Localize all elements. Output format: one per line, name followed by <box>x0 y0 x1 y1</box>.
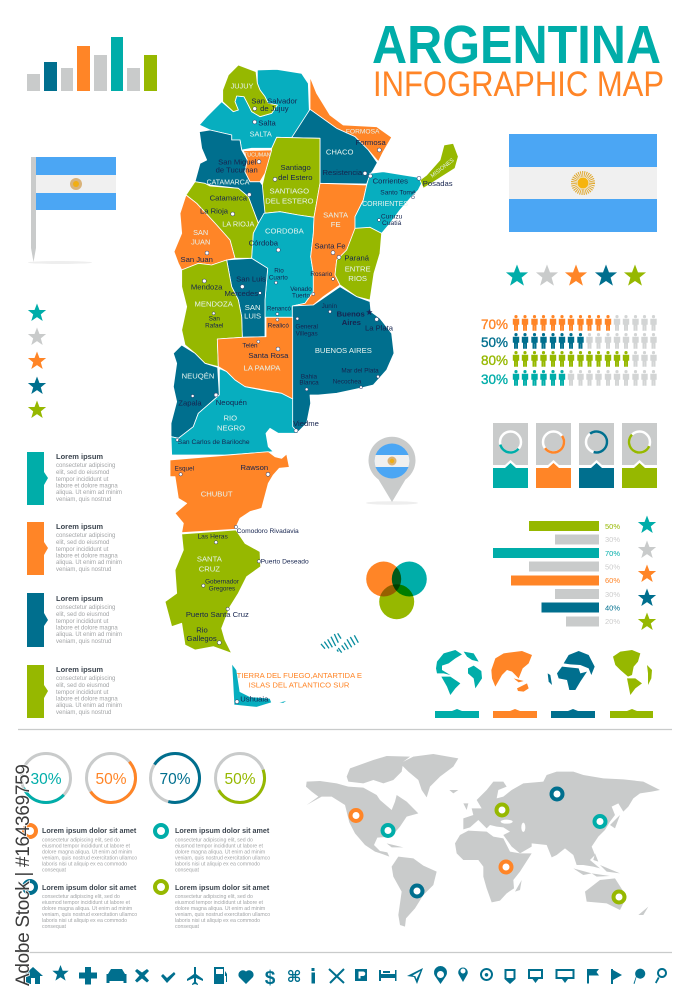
people pictogram chart: 50% <box>481 335 508 350</box>
icon: dollar: $ <box>265 968 276 989</box>
city labels: Corrientes <box>373 176 408 185</box>
card dark blue <box>579 423 614 488</box>
small flag on pole <box>28 157 116 264</box>
text block teal: Lorem ipsum <box>56 452 103 461</box>
globe dark blue <box>548 651 595 690</box>
icon: info <box>312 968 315 984</box>
divider lines <box>18 730 672 952</box>
city labels: Rosario <box>310 271 333 278</box>
text block teal: aliqua. Ut enim ad minim <box>56 490 122 496</box>
horizontal bar chart: 20% <box>605 617 620 626</box>
city labels: del Estero <box>278 173 313 182</box>
text block orange: elit, sed do eiusmod <box>56 540 109 546</box>
province labels: TUCUMAN <box>244 153 271 159</box>
bullet block teal: consectetur adipiscing elit, sed do <box>175 838 253 844</box>
title <box>372 15 664 104</box>
city labels: Las Heras <box>197 533 229 540</box>
title: ARGENTINA <box>372 15 661 75</box>
city labels: Mar del Plata <box>341 367 379 374</box>
icon: car <box>106 969 126 983</box>
bullet block orange: veniam, quis nostrud exercitation ullamco <box>42 856 137 862</box>
city labels: de Tucuman <box>216 165 258 174</box>
bullet block teal: veniam, quis nostrud exercitation ullamco <box>175 856 270 862</box>
province: Jujuy <box>223 65 277 117</box>
city labels: Santa Fe <box>314 241 346 250</box>
icon: plane <box>187 967 203 985</box>
icon: Malvinas islands <box>321 633 358 653</box>
city labels: Rawson <box>240 463 268 472</box>
bullet block dark blue: consectetur adipiscing elit, sed do <box>42 894 120 900</box>
map of Argentina <box>165 65 458 707</box>
province labels: SAN <box>193 228 208 237</box>
label: Tierra del Fuego: TIERRA DEL FUEGO,ANTARTIDA E <box>237 671 362 680</box>
icon: pin two <box>458 968 468 982</box>
people pictogram chart <box>481 315 657 387</box>
text block teal <box>27 452 122 505</box>
province labels: JUJUY <box>231 81 254 90</box>
bullet text blocks <box>24 825 270 930</box>
city labels: Rio <box>274 268 284 275</box>
city labels: Córdoba <box>249 238 279 247</box>
province labels: SANTA <box>323 211 349 220</box>
large flag <box>509 134 657 232</box>
bullet block green: consequat <box>175 924 199 930</box>
bullet block orange: dolore magna aliqua. Ut enim ad minim <box>42 850 132 856</box>
city labels: Cuarto <box>269 274 288 281</box>
city labels: Blanca <box>299 380 319 387</box>
text block green: labore et dolore magna <box>56 696 118 702</box>
donut 50 green <box>209 747 271 809</box>
text block dark blue: elit, sed do eiusmod <box>56 612 109 618</box>
text block orange: Lorem ipsum <box>56 522 103 531</box>
city labels: Catamarca <box>210 194 248 203</box>
icon: heart <box>238 970 254 984</box>
province: Cordoba <box>252 212 314 317</box>
city labels: San Juan <box>180 255 213 264</box>
text block orange: consectetur adipiscing <box>56 533 115 539</box>
province: Tierra del Fuego <box>232 663 288 707</box>
text block green: aliqua. Ut enim ad minim <box>56 703 122 709</box>
city labels: Rafael <box>205 323 223 330</box>
bullet block green <box>155 881 270 930</box>
city labels: Paraná <box>344 254 370 263</box>
bullet block dark blue: veniam, quis nostrud exercitation ullamco <box>42 912 137 918</box>
icon: capital star <box>366 309 373 315</box>
icon: bed <box>379 970 396 981</box>
people pictogram chart: 70% <box>481 317 508 332</box>
city labels: Mendoza <box>191 283 223 292</box>
province labels: JUAN <box>191 237 210 246</box>
icon: flag <box>587 969 599 984</box>
province: Santa Fe <box>292 183 367 306</box>
Eurasia <box>463 772 660 868</box>
globe caption bars <box>435 709 653 718</box>
province labels: SANTIAGO <box>270 186 309 195</box>
city labels: La Rioja <box>200 206 229 215</box>
horizontal bar chart: 30% <box>605 590 620 599</box>
text block orange: labore et dolore magna <box>56 554 118 560</box>
province labels: MISIONES <box>430 158 456 179</box>
province labels: SANTA <box>197 554 223 563</box>
donut 50: 50% <box>95 771 127 788</box>
province: San Juan <box>174 195 235 270</box>
city labels: Puerto Deseado <box>261 559 309 566</box>
city labels: Gallegos <box>187 634 217 643</box>
province: Tucuman <box>243 150 272 182</box>
donut 30: 30% <box>30 771 62 788</box>
province labels: LA RIOJA <box>222 220 255 229</box>
text block teal: veniam, quis nostrud <box>56 497 111 503</box>
text block dark blue: veniam, quis nostrud <box>56 639 111 645</box>
world map <box>306 754 660 927</box>
icon: speech bubble two <box>528 969 543 983</box>
legend stars left <box>28 304 46 418</box>
province: Formosa <box>310 77 392 162</box>
city labels: San Miguel <box>218 157 257 166</box>
rating stars <box>506 264 646 286</box>
province: Santiago del Estero <box>262 137 320 217</box>
city labels: Resistencia <box>323 168 363 177</box>
text block orange <box>27 522 122 575</box>
province labels: RIO <box>224 414 237 423</box>
city labels: Gregores <box>209 585 235 592</box>
globes <box>436 650 652 695</box>
card teal <box>493 423 528 488</box>
text block green: veniam, quis nostrud <box>56 710 111 716</box>
bullet block green: dolore magna aliqua. Ut enim ad minim <box>175 906 265 912</box>
card green <box>622 423 657 488</box>
city labels: Esquel <box>175 465 194 472</box>
city labels: Necochea <box>333 378 362 385</box>
bullet block dark blue: consequat <box>42 924 66 930</box>
text block dark blue: aliqua. Ut enim ad minim <box>56 632 122 638</box>
city labels: Cuatiá <box>382 220 402 227</box>
icon: command: ⌘ <box>287 967 301 986</box>
Australia <box>585 878 627 910</box>
icon: target <box>480 968 493 981</box>
province: Chubut <box>170 452 289 533</box>
province labels: SAN <box>245 303 261 312</box>
city labels: Telén <box>242 343 258 350</box>
text block orange: aliqua. Ut enim ad minim <box>56 560 122 566</box>
city labels: Mercedes <box>225 289 258 298</box>
bullet block orange: consequat <box>42 868 66 874</box>
city labels: Posadas <box>423 179 453 188</box>
bullet block teal: dolore magna aliqua. Ut enim ad minim <box>175 850 265 856</box>
horizontal bar chart <box>493 521 620 626</box>
bullet block dark blue: Lorem ipsum dolor sit amet <box>42 883 137 892</box>
text block teal: tempor incididunt ut <box>56 477 109 483</box>
icon: home <box>23 967 43 984</box>
text block dark blue: labore et dolore magna <box>56 626 118 632</box>
province: Buenos Aires <box>292 287 394 432</box>
ring progress cards <box>493 423 657 488</box>
South America <box>392 857 437 927</box>
donut 50 <box>76 743 146 813</box>
donut 70: 70% <box>159 771 191 788</box>
horizontal bar chart: 50% <box>605 562 620 572</box>
horizontal bar chart: 60% <box>605 576 620 585</box>
icon: flag map pin <box>366 437 418 505</box>
province labels: BUENOS AIRES <box>315 346 372 355</box>
bullet block teal: eiusmod tempor incididunt ut labore et <box>175 844 264 850</box>
city labels: Comodoro Rivadavia <box>237 528 299 535</box>
province: Santa Cruz <box>165 530 261 653</box>
province labels: FORMOSA <box>346 128 380 135</box>
stock watermark: Adobe Stock | #164369759 <box>13 764 34 986</box>
icon: plus <box>79 967 97 984</box>
world map markers <box>350 788 624 902</box>
province: Neuquen <box>171 345 219 438</box>
bullet block green: laboris nisi ut aliquip ex ea commodo <box>175 918 260 924</box>
bullet block orange: consectetur adipiscing elit, sed do <box>42 838 120 844</box>
city labels: Aires <box>342 318 361 327</box>
North America <box>306 781 418 857</box>
icon row <box>23 965 667 989</box>
city labels: General <box>295 323 318 330</box>
text block dark blue: Lorem ipsum <box>56 594 103 603</box>
city labels: Zapala <box>178 398 202 407</box>
text block green: consectetur adipiscing <box>56 676 115 682</box>
city labels: Puerto Santa Cruz <box>186 610 249 619</box>
province labels: MENDOZA <box>195 299 234 308</box>
city labels: Bahia <box>301 373 318 380</box>
Arctic Canada <box>347 756 410 783</box>
bullet block teal: laboris nisi ut aliquip ex ea commodo <box>175 862 260 868</box>
city labels: Viedme <box>293 419 319 428</box>
donut 30 <box>11 743 81 813</box>
city labels <box>175 96 453 704</box>
province labels: CRUZ <box>199 564 220 573</box>
city labels: Formosa <box>356 138 387 147</box>
city labels: Salta <box>258 118 276 127</box>
province labels: DEL ESTERO <box>265 196 313 205</box>
province labels: CHACO <box>326 148 354 157</box>
islands <box>387 790 648 915</box>
icon: check <box>161 972 176 983</box>
icon: speech bubble three <box>556 969 574 983</box>
bullet block dark blue: dolore magna aliqua. Ut enim ad minim <box>42 906 132 912</box>
icon: navigation <box>407 968 423 984</box>
globe green <box>613 650 652 695</box>
bullet block teal: Lorem ipsum dolor sit amet <box>175 826 270 835</box>
icon: speech bubble one <box>504 969 516 984</box>
province labels: CHUBUT <box>201 490 233 499</box>
city dots <box>176 107 421 704</box>
province: San Luis <box>227 258 268 337</box>
text block green: Lorem ipsum <box>56 665 103 674</box>
city labels: Santa Rosa <box>248 351 289 360</box>
province labels: RIOS <box>348 274 367 283</box>
horizontal bar chart: 40% <box>605 604 620 612</box>
city labels: Buenos <box>337 310 365 319</box>
legend stars right <box>638 516 656 630</box>
province: La Pampa <box>217 317 293 399</box>
province: Salta <box>199 69 309 150</box>
province: Mendoza <box>182 260 242 367</box>
inland seas <box>501 820 525 832</box>
province labels: LUIS <box>244 312 261 321</box>
bullet block teal: consequat <box>175 868 199 874</box>
text block orange: veniam, quis nostrud <box>56 567 111 573</box>
province labels: CORDOBA <box>265 226 305 235</box>
text block green: tempor incididunt ut <box>56 690 109 696</box>
city labels: de Jujuy <box>260 104 289 113</box>
text block teal: elit, sed do eiusmod <box>56 470 109 476</box>
city labels: San Carlos de Bariloche <box>178 439 250 446</box>
province labels: NEUQÉN <box>182 371 214 380</box>
city labels: San Salvador <box>251 96 298 105</box>
Africa <box>455 831 532 902</box>
text block teal: labore et dolore magna <box>56 484 118 490</box>
donut 70 <box>141 744 209 812</box>
city labels: San <box>209 316 220 323</box>
city labels: San Luis <box>236 275 266 284</box>
bar chart: top left <box>27 37 157 91</box>
text block teal: consectetur adipiscing <box>56 463 115 469</box>
bullet block teal <box>155 825 270 874</box>
people pictogram chart: 80% <box>481 353 508 368</box>
icon: star <box>52 965 69 981</box>
province: Rio Negro <box>171 368 298 455</box>
bullet block orange: eiusmod tempor incididunt ut labore et <box>42 844 131 850</box>
bullet block orange <box>24 825 137 874</box>
province labels: CORRIENTES <box>362 201 408 208</box>
icon: fuel <box>214 967 227 984</box>
text block green <box>27 665 122 718</box>
city labels: Curuzu <box>381 214 403 221</box>
city labels: Ushuaia <box>240 695 269 704</box>
globe teal <box>436 650 482 695</box>
bullet block dark blue: laboris nisi ut aliquip ex ea commodo <box>42 918 127 924</box>
province labels: LA PAMPA <box>244 364 281 373</box>
bullet block green: veniam, quis nostrud exercitation ullamco <box>175 912 270 918</box>
city labels: Venado <box>290 286 312 293</box>
globe orange <box>491 651 532 692</box>
horizontal bar chart: 70% <box>605 549 620 558</box>
city labels: Renancó <box>267 307 292 313</box>
bullet block green: eiusmod tempor incididunt ut labore et <box>175 900 264 906</box>
icon: pin one <box>434 966 447 984</box>
province labels: ENTRE <box>345 265 371 274</box>
province: Chaco <box>292 109 377 184</box>
icon: search <box>655 968 667 984</box>
province: Catamarca <box>195 130 265 223</box>
province labels: NEGRO <box>217 424 245 433</box>
text blocks left <box>27 452 122 718</box>
city labels: Tuerto <box>292 293 311 300</box>
label: Tierra del Fuego <box>237 671 362 689</box>
province labels <box>182 81 456 573</box>
card orange <box>536 423 571 488</box>
text block dark blue: tempor incididunt ut <box>56 619 109 625</box>
horizontal bar chart: 50% <box>605 522 620 531</box>
bullet block green: consectetur adipiscing elit, sed do <box>175 894 253 900</box>
province: Misiones <box>420 143 458 188</box>
province labels: SALTA <box>250 129 272 138</box>
bullet block dark blue <box>24 881 137 930</box>
icon: cutlery <box>329 969 344 983</box>
province labels: CATAMARCA <box>207 180 250 187</box>
city labels: Santiago <box>281 163 311 172</box>
city labels: Santo Tomé <box>380 189 416 196</box>
city labels: Junín <box>322 303 338 310</box>
bullet block orange: Lorem ipsum dolor sit amet <box>42 826 137 835</box>
Greenland <box>400 754 458 797</box>
text block dark blue <box>27 593 122 647</box>
donut charts <box>11 743 271 813</box>
province labels: FE <box>331 220 341 229</box>
label: Tierra del Fuego: ISLAS DEL ATLANTICO SUR <box>249 680 350 689</box>
icon: pennant <box>611 969 622 984</box>
venn diagram <box>366 562 427 619</box>
city labels: Rio <box>196 626 208 635</box>
bullet block orange: laboris nisi ut aliquip ex ea commodo <box>42 862 127 868</box>
text block green: elit, sed do eiusmod <box>56 683 109 689</box>
horizontal bar chart: 30% <box>605 535 620 544</box>
city labels: La Plata <box>365 324 394 333</box>
bullet block green: Lorem ipsum dolor sit amet <box>175 883 270 892</box>
city labels: Villegas <box>296 330 318 337</box>
city labels: Neoquén <box>216 398 247 407</box>
icon: cross <box>135 969 149 982</box>
icon: parking <box>355 969 367 981</box>
text block orange: tempor incididunt ut <box>56 547 109 553</box>
city labels: Realicó <box>268 323 289 330</box>
province: Entre Rios <box>335 227 382 300</box>
donut 50 green: 50% <box>224 771 256 788</box>
text block dark blue: consectetur adipiscing <box>56 605 115 611</box>
province: Corrientes <box>355 172 422 233</box>
city labels: Gobernador <box>205 579 239 586</box>
people pictogram chart: 30% <box>481 372 508 387</box>
province: La Rioja <box>186 182 258 258</box>
icon: pin round <box>634 969 645 984</box>
bullet block dark blue: eiusmod tempor incididunt ut labore et <box>42 900 131 906</box>
